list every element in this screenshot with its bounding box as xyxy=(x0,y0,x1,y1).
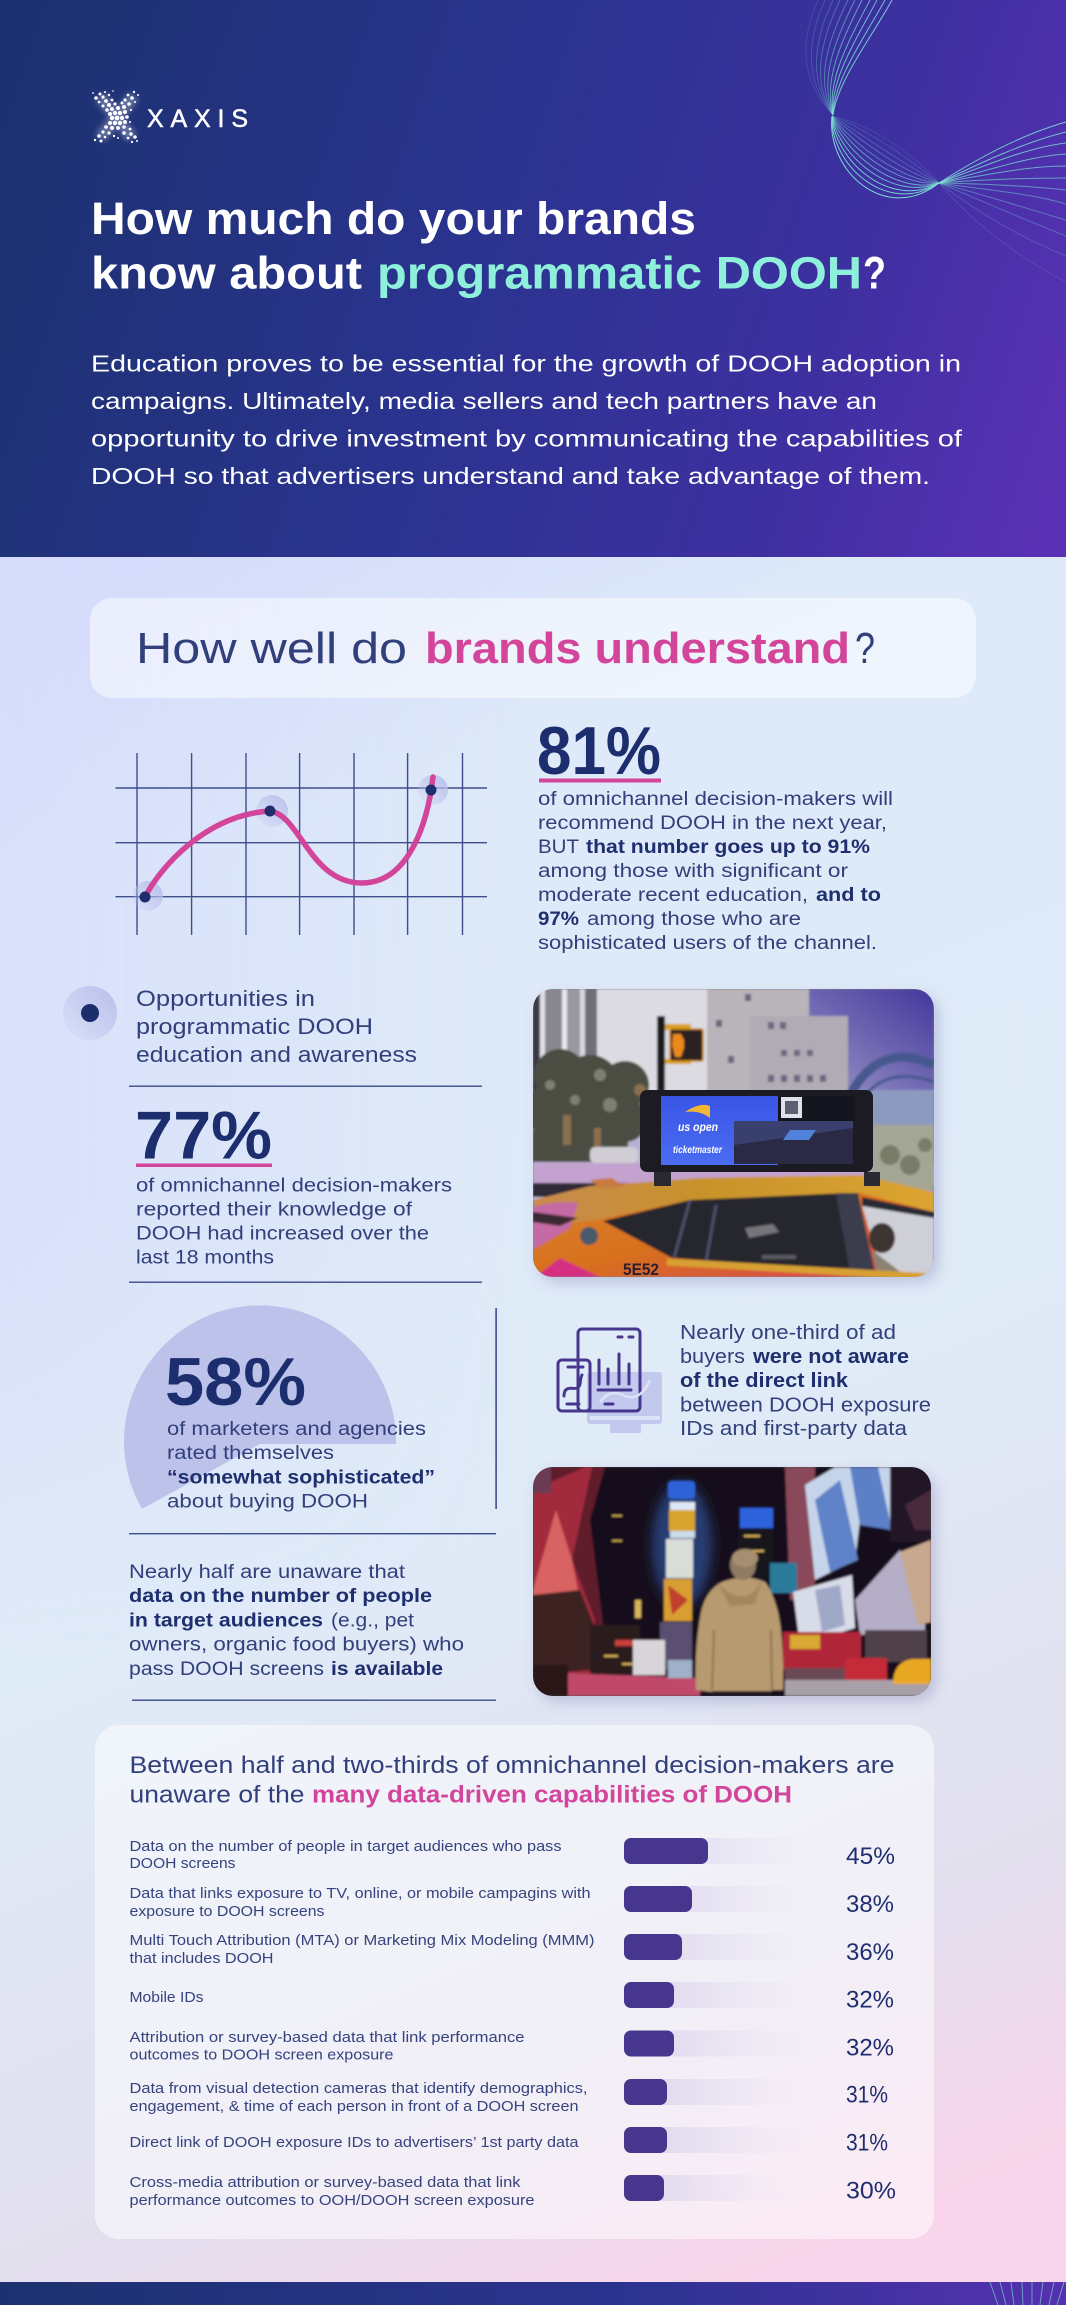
stat: 77%: 77% xyxy=(135,1098,272,1174)
icon: devices with charts xyxy=(558,1329,662,1433)
row: attribution 32% xyxy=(130,2030,894,2064)
row: 45%: Data on the number of people in target audiences who pass xyxy=(130,1839,562,1855)
stat text: that number goes up to 91% xyxy=(586,837,870,858)
panel heading: many data-driven capabilities of DOOH xyxy=(312,1782,792,1808)
row: direct link 31% xyxy=(130,2127,888,2156)
intro paragraph: opportunity to drive investment by communicating the capabilities of xyxy=(91,426,963,452)
title: programmatic DOOH xyxy=(377,248,862,298)
row: direct link 31%: Direct link of DOOH exposure IDs to advertisers’ 1st party data xyxy=(130,2135,580,2151)
stat text: rated themselves xyxy=(167,1443,334,1464)
row: cross-media 30%: 30% xyxy=(846,2178,896,2204)
row: 38%: 38% xyxy=(846,1891,894,1918)
photo: person in Times Square xyxy=(533,1467,931,1696)
text block: one-third of ad buyers: were not aware xyxy=(752,1346,909,1368)
row: visual detection 31%: Data from visual detection cameras that identify demographics, xyxy=(130,2081,588,2097)
text block: nearly half unaware: Nearly half are unaware that xyxy=(129,1562,406,1583)
text block: one-third of ad buyers: between DOOH exposure xyxy=(680,1394,931,1416)
row: 36%: 36% xyxy=(846,1939,894,1966)
section heading: opportunities: education and awareness xyxy=(136,1042,417,1067)
row: mobile IDs 32% xyxy=(130,1982,894,2014)
stat text: of omnichannel decision-makers will xyxy=(538,789,893,810)
stat: 58% xyxy=(165,1344,435,1512)
title: know about xyxy=(91,248,362,298)
intro paragraph: DOOH so that advertisers understand and take advantage of them. xyxy=(91,463,930,489)
stat text: BUT xyxy=(538,837,579,858)
stat text xyxy=(538,789,893,954)
stat text: last 18 months xyxy=(136,1248,274,1268)
DOOH screen on taxi: ticketmaster xyxy=(673,1145,723,1156)
text block: nearly half unaware: owners, organic food buyers) who xyxy=(129,1634,464,1656)
row: 45%: DOOH screens xyxy=(130,1856,236,1872)
text block: one-third of ad buyers: of the direct link xyxy=(680,1370,849,1392)
photo scene xyxy=(524,989,953,1277)
stat text xyxy=(136,1176,452,1268)
stat text: among those who are xyxy=(587,909,801,930)
row: 38%: Data that links exposure to TV, online, or mobile campagins with xyxy=(130,1886,590,1902)
text block: nearly half unaware: is available xyxy=(331,1659,443,1680)
row: visual detection 31% xyxy=(130,2079,888,2115)
stat text xyxy=(167,1419,435,1512)
header banner xyxy=(0,0,1066,557)
heading panel: How well do brands understand xyxy=(90,598,976,698)
stat: 81% xyxy=(537,713,893,954)
footer band xyxy=(0,2282,1066,2305)
chart halos xyxy=(133,775,448,911)
stat text: DOOH had increased over the xyxy=(136,1224,429,1244)
stat: 81%: 81% xyxy=(537,713,661,789)
stat: 77% xyxy=(135,1098,452,1268)
row: direct link 31%: 31% xyxy=(846,2130,888,2156)
row: mobile IDs 32%: Mobile IDs xyxy=(130,1990,204,2006)
panel: data-driven capabilities xyxy=(95,1725,934,2239)
row: cross-media 30%: Cross-media attribution or survey-based data that link xyxy=(130,2175,521,2191)
text block: nearly half unaware xyxy=(129,1562,464,1680)
text block: one-third of ad buyers xyxy=(680,1322,931,1440)
stat text: and to xyxy=(816,885,881,906)
row: 36%: Multi Touch Attribution (MTA) or Marketing Mix Modeling (MMM) xyxy=(130,1933,594,1949)
stat text: sophisticated users of the channel. xyxy=(538,933,877,954)
stat text: of marketers and agencies xyxy=(167,1419,426,1440)
text block: one-third of ad buyers: IDs and first-party data xyxy=(680,1418,908,1440)
row: 36%: that includes DOOH xyxy=(130,1951,274,1967)
stat text: of omnichannel decision-makers xyxy=(136,1176,452,1196)
stat text: moderate recent education, xyxy=(538,885,808,906)
heading panel: How well do brands understand: How well do xyxy=(136,624,407,673)
logo: Xaxis xyxy=(92,90,248,143)
logo icon: dotted X xyxy=(92,90,139,143)
stat text: 97% xyxy=(538,909,579,930)
taxi number: 5E52 xyxy=(623,1260,659,1279)
row: 38%: exposure to DOOH screens xyxy=(130,1904,324,1920)
row: visual detection 31%: 31% xyxy=(846,2082,888,2108)
heading panel: How well do brands understand: brands understand xyxy=(425,624,850,673)
text block: nearly half unaware: in target audiences xyxy=(129,1610,323,1632)
row: cross-media 30% xyxy=(130,2175,896,2209)
page background xyxy=(0,557,1066,2282)
stat text: reported their knowledge of xyxy=(136,1200,413,1220)
text block: nearly half unaware: pass DOOH screens xyxy=(129,1659,324,1680)
row: attribution 32%: Attribution or survey-based data that link performance xyxy=(130,2030,524,2046)
section heading: opportunities xyxy=(136,986,417,1067)
intro paragraph: campaigns. Ultimately, media sellers and tech partners have an xyxy=(91,388,877,414)
icon: eye bullet xyxy=(63,986,117,1040)
section heading: opportunities: Opportunities in xyxy=(136,986,315,1011)
row: 38% xyxy=(130,1886,894,1920)
stat text: among those with significant or xyxy=(538,861,849,882)
row: 45% xyxy=(130,1838,895,1872)
row: 36% xyxy=(130,1933,894,1967)
text block: nearly half unaware: (e.g., pet xyxy=(331,1610,415,1632)
taxi body xyxy=(533,1191,934,1277)
stat: 58%: 58% xyxy=(165,1344,306,1420)
panel heading: Between half and two-thirds of omnichannel decision-makers are xyxy=(130,1752,894,1779)
title: ? xyxy=(863,248,886,298)
logo wordmark: XAXIS xyxy=(147,105,248,133)
row: mobile IDs 32%: 32% xyxy=(846,1986,894,2014)
pie shape behind 58% stat xyxy=(124,1305,396,1509)
chart grid xyxy=(116,753,487,935)
chart points xyxy=(140,784,436,902)
line chart illustration xyxy=(116,753,487,935)
decorative wave lines xyxy=(806,0,1066,282)
row: visual detection 31%: engagement, & time of each person in front of a DOOH screen xyxy=(130,2099,578,2115)
chart curve xyxy=(145,777,433,897)
panel heading: unaware of the xyxy=(130,1782,304,1808)
intro paragraph xyxy=(91,350,963,489)
DOOH screen on taxi xyxy=(640,1090,873,1172)
DOOH screen on taxi: us open xyxy=(678,1120,718,1134)
panel heading xyxy=(130,1752,894,1808)
photo: taxi-top DOOH screen xyxy=(524,989,953,1279)
intro paragraph: Education proves to be essential for the growth of DOOH adoption in xyxy=(91,350,961,376)
text block: one-third of ad buyers: Nearly one-third of ad xyxy=(680,1322,896,1344)
taxi side window xyxy=(603,1193,850,1271)
text block: nearly half unaware: data on the number of people xyxy=(129,1586,432,1607)
heading panel: How well do brands understand: ? xyxy=(855,624,875,673)
row: 45%: 45% xyxy=(846,1843,895,1870)
row: attribution 32%: 32% xyxy=(846,2034,894,2062)
row: cross-media 30%: performance outcomes to OOH/DOOH screen exposure xyxy=(130,2193,534,2209)
stat text: about buying DOOH xyxy=(167,1492,368,1512)
title xyxy=(91,193,886,298)
title: How much do your brands xyxy=(91,193,696,244)
stat text: recommend DOOH in the next year, xyxy=(538,813,887,834)
row: attribution 32%: outcomes to DOOH screen exposure xyxy=(130,2048,394,2064)
text block: one-third of ad buyers: buyers xyxy=(680,1346,745,1368)
section heading: opportunities: programmatic DOOH xyxy=(136,1014,373,1039)
person xyxy=(696,1578,783,1696)
stat text: “somewhat sophisticated” xyxy=(167,1468,435,1488)
